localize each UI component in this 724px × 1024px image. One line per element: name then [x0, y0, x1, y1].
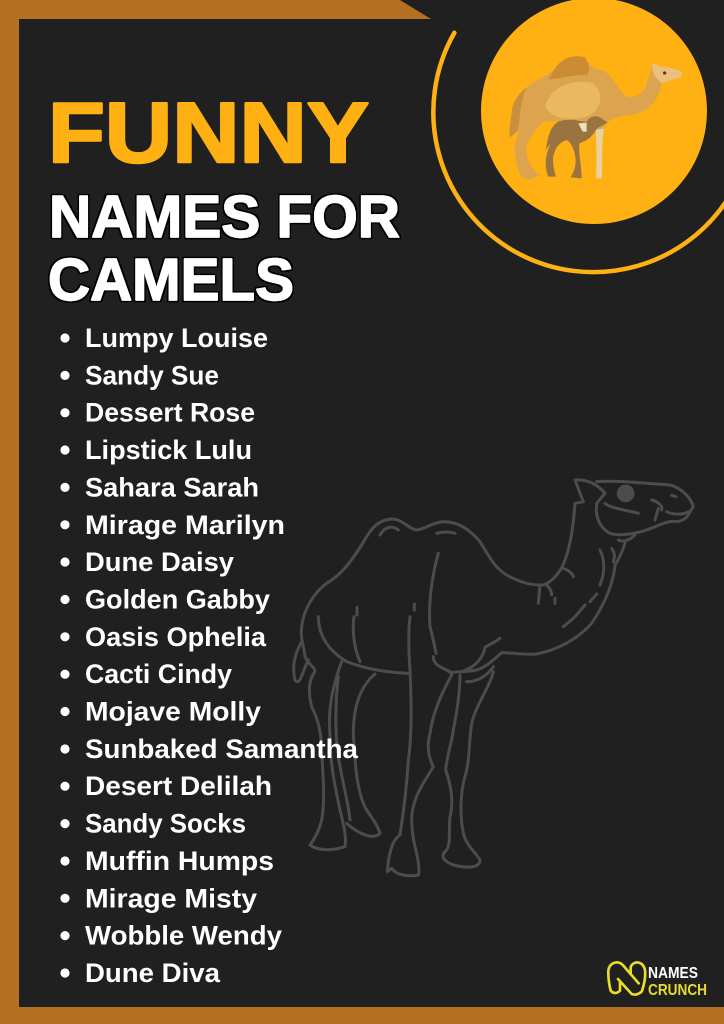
adult front leg — [596, 128, 604, 178]
name 1: Lumpy Louise — [85, 323, 268, 353]
name 7: Dune Daisy — [85, 547, 234, 577]
name 15: Muffin Humps — [85, 846, 274, 876]
adult camel hump shade — [548, 56, 589, 79]
name 14: Sandy Socks — [85, 809, 246, 839]
name 13: Desert Delilah — [85, 771, 272, 801]
adult tail — [509, 87, 527, 137]
name 9: Oasis Ophelia — [85, 622, 266, 652]
watermark: camel outline — [294, 480, 693, 876]
list of funny camel names — [60, 323, 358, 988]
name 16: Mirage Misty — [85, 883, 257, 913]
calf — [546, 116, 608, 178]
logo: Names Crunch — [608, 962, 707, 999]
name 2: Sandy Sue — [85, 360, 219, 390]
heading line 1: NAMES FOR — [49, 184, 400, 250]
logo word NAMES: NAMES — [648, 965, 698, 982]
adult camel — [515, 56, 682, 180]
outer gold arc — [433, 33, 724, 272]
logo icon — [608, 962, 645, 995]
logo word CRUNCH: CRUNCH — [648, 982, 707, 999]
name 6: Mirage Marilyn — [85, 510, 285, 540]
name 12: Sunbaked Samantha — [85, 734, 358, 764]
name 4: Lipstick Lulu — [85, 435, 252, 465]
gold circle — [481, 0, 707, 224]
name 3: Dessert Rose — [85, 398, 255, 428]
bullets — [60, 333, 70, 978]
name 5: Sahara Sarah — [85, 472, 259, 502]
name 8: Golden Gabby — [85, 584, 270, 614]
name 11: Mojave Molly — [85, 696, 261, 726]
icon: camel with calf — [509, 56, 682, 180]
heading line 2: CAMELS — [48, 247, 294, 313]
name 10: Cacti Cindy — [85, 659, 232, 689]
calf leg highlight — [578, 123, 587, 132]
adult camel highlight — [545, 82, 600, 119]
heading: NAMES FOR CAMELS — [48, 184, 400, 313]
name 18: Dune Diva — [85, 958, 220, 988]
name 17: Wobble Wendy — [85, 921, 282, 951]
adult head — [652, 63, 682, 83]
heading: FUNNY: FUNNY — [48, 86, 369, 181]
adult eye — [663, 71, 666, 75]
